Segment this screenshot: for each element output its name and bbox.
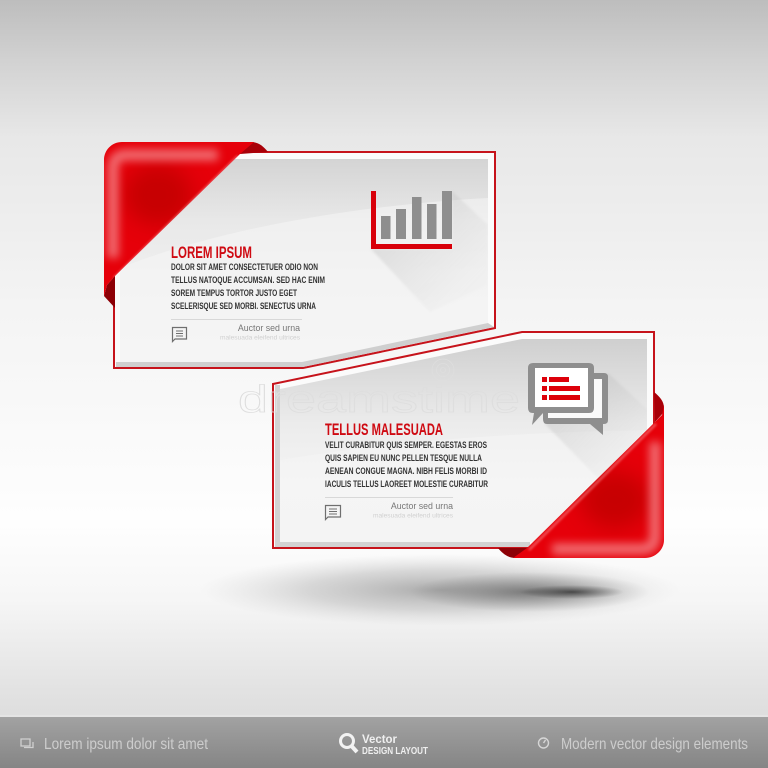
body text: DOLOR SIT AMET CONSECTETUER ODIO NON bbox=[171, 262, 318, 273]
icon: magnifier bbox=[340, 734, 357, 752]
logo text bbox=[362, 734, 428, 757]
caption bbox=[220, 323, 300, 342]
title: LOREM IPSUM bbox=[171, 244, 252, 262]
body text: VELIT CURABITUR QUIS SEMPER. EGESTAS EROS bbox=[325, 440, 487, 451]
icon: chat bbox=[21, 739, 33, 748]
panel: lorem ipsum bbox=[114, 152, 495, 368]
caption: malesuada eleifend ultrices bbox=[373, 512, 453, 520]
card face bbox=[122, 159, 488, 312]
icon: comment bbox=[326, 506, 340, 520]
footer bar bbox=[0, 715, 768, 768]
body text: SCELERISQUE SED MORBI. SENECTUS URNA bbox=[171, 301, 316, 312]
card face bbox=[280, 339, 647, 478]
caption: Auctor sed urna bbox=[238, 323, 300, 333]
body text: TELLUS NATOQUE ACCUMSAN. SED HAC ENIM bbox=[171, 275, 325, 286]
logo text: DESIGN LAYOUT bbox=[362, 745, 428, 757]
body text bbox=[171, 262, 325, 312]
body text bbox=[325, 440, 488, 490]
ribbon: bottom right bbox=[498, 392, 664, 558]
caption: malesuada eleifend ultrices bbox=[220, 334, 300, 342]
logo text: Vector bbox=[362, 734, 398, 746]
watermark bbox=[238, 359, 520, 421]
footer left text: Lorem ipsum dolor sit amet bbox=[44, 736, 208, 753]
body text: QUIS SAPIEN EU NUNC PELLEN TESQUE NULLA bbox=[325, 453, 482, 464]
ribbon: top left bbox=[104, 142, 268, 308]
floor shadow bbox=[200, 554, 680, 626]
card frame bbox=[114, 152, 495, 368]
caption bbox=[373, 501, 453, 520]
icon: bar chart bbox=[371, 191, 452, 249]
icon: speech bubbles bbox=[528, 363, 608, 435]
body text: IACULIS TELLUS LAOREET MOLESTIE CURABITUR bbox=[325, 479, 488, 490]
icon: clock bbox=[538, 738, 548, 748]
body text: SOREM TEMPUS TORTOR JUSTO EGET bbox=[171, 288, 297, 299]
body text: AENEAN CONGUE MAGNA. NIBH FELIS MORBI ID bbox=[325, 466, 487, 477]
card frame bbox=[273, 332, 654, 548]
caption: Auctor sed urna bbox=[391, 501, 453, 511]
title: TELLUS MALESUADA bbox=[325, 421, 443, 439]
panel: tellus malesuada bbox=[273, 332, 654, 548]
watermark: dreamstime bbox=[238, 379, 520, 421]
icon: comment bbox=[172, 328, 186, 342]
